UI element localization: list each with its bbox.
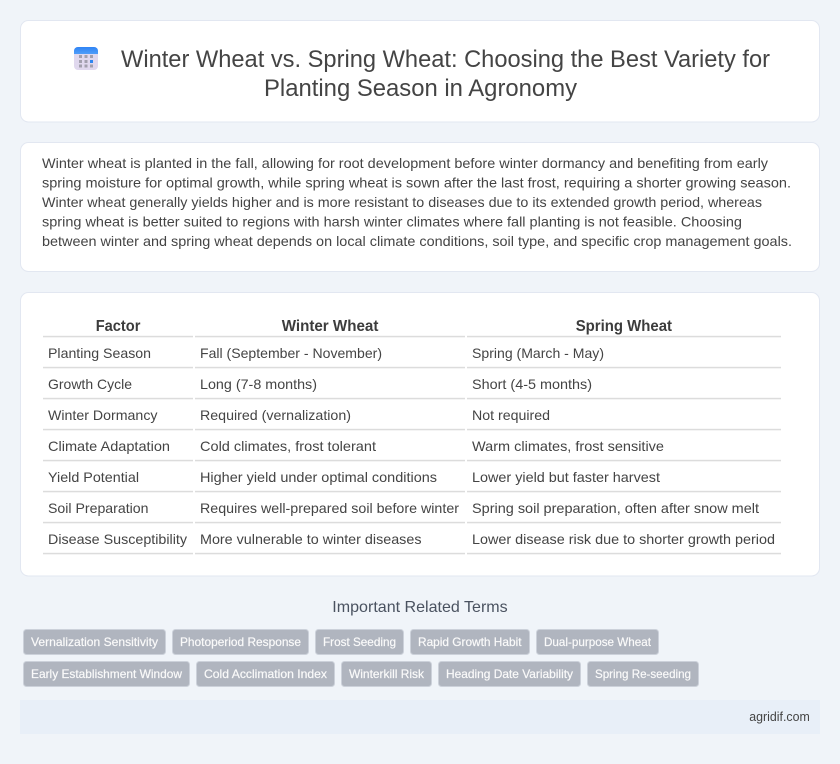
- tag: [172, 630, 308, 654]
- tag: Cold Acclimation Index: [204, 667, 327, 681]
- table row: growth cycle: Long (7-8 months): [200, 376, 317, 392]
- heading: related terms: Important Related Terms: [332, 599, 508, 616]
- tag: Winterkill Risk: [349, 667, 425, 681]
- panel: summary paragraph: [20, 142, 820, 272]
- table row: planting season: Planting Season: [48, 345, 151, 361]
- tag: [342, 662, 432, 686]
- tag: Early Establishment Window: [31, 667, 182, 681]
- tag: [24, 630, 166, 654]
- tag: Vernalization Sensitivity: [31, 635, 158, 649]
- table row: disease susceptibility: Disease Susceptibility: [48, 531, 187, 547]
- table header row: Factor: [96, 318, 140, 335]
- table row: planting season: [48, 345, 604, 361]
- table row: winter dormancy: Not required: [472, 407, 550, 423]
- tag: [438, 662, 580, 686]
- table row: growth cycle: Growth Cycle: [48, 376, 132, 392]
- tag: [316, 630, 404, 654]
- table row: soil preparation: Soil Preparation: [48, 500, 148, 516]
- panel: title card: [20, 20, 820, 122]
- table row: yield potential: Lower yield but faster harvest: [472, 469, 660, 485]
- text block: summary: spring moisture for optimal growth, while spring wheat is sown after the last frost, requiring a shorter growing season.: [42, 174, 791, 190]
- title: Planting Season in Agronomy: [264, 75, 577, 102]
- tag: Rapid Growth Habit: [418, 635, 522, 649]
- icon: calendar: [74, 47, 98, 70]
- tag: [410, 630, 530, 654]
- table header row: [96, 318, 673, 335]
- table row: climate adaptation: Cold climates, frost tolerant: [200, 438, 376, 454]
- table row: winter dormancy: Winter Dormancy: [48, 407, 158, 423]
- tag: Frost Seeding: [323, 635, 396, 649]
- tag: [196, 662, 334, 686]
- tag: Spring Re-seeding: [595, 667, 691, 681]
- table row: climate adaptation: Climate Adaptation: [48, 438, 170, 454]
- table row: soil preparation: Requires well-prepared soil before winter: [200, 500, 459, 516]
- table row: disease susceptibility: More vulnerable to winter diseases: [200, 531, 422, 547]
- table row: soil preparation: [48, 500, 759, 516]
- footer: agridif.com: [749, 709, 810, 724]
- table row: soil preparation: Spring soil preparation, often after snow melt: [472, 500, 759, 516]
- panel: comparison table: [20, 292, 820, 576]
- tag: [588, 662, 698, 686]
- table row: yield potential: Higher yield under optimal conditions: [200, 469, 437, 485]
- text block: summary: between winter and spring wheat depends on local climate conditions, soil type, and specific crop management goals.: [42, 233, 792, 249]
- tags: related terms: [24, 630, 698, 686]
- text block: summary: Winter wheat generally yields higher and is more resistant to diseases due to its extended growth period, whereas: [42, 194, 762, 210]
- tag: [536, 630, 658, 654]
- table row: climate adaptation: [48, 438, 664, 454]
- table row: planting season: Fall (September - November): [200, 345, 382, 361]
- table row: winter dormancy: Required (vernalization): [200, 407, 351, 423]
- table row: disease susceptibility: [48, 531, 775, 547]
- table row: planting season: Spring (March - May): [472, 345, 604, 361]
- table row: growth cycle: Short (4-5 months): [472, 376, 592, 392]
- text block: summary: Winter wheat is planted in the fall, allowing for root development before winter dormancy and benefiting from early: [42, 155, 768, 171]
- tag: Photoperiod Response: [180, 635, 301, 649]
- tag: Dual-purpose Wheat: [544, 635, 652, 649]
- title: [121, 46, 770, 102]
- text block: summary: [42, 155, 792, 249]
- title: Winter Wheat vs. Spring Wheat: Choosing the Best Variety for: [121, 46, 770, 73]
- tag: Heading Date Variability: [446, 667, 573, 681]
- table row: climate adaptation: Warm climates, frost sensitive: [472, 438, 664, 454]
- footer: [20, 700, 820, 734]
- table row: disease susceptibility: Lower disease risk due to shorter growth period: [472, 531, 775, 547]
- table header row: Spring Wheat: [576, 318, 673, 335]
- text block: summary: spring wheat is better suited to regions with harsh winter climates where fall planting is not feasible. Choosing: [42, 214, 742, 230]
- table row: yield potential: [48, 469, 660, 485]
- tag: [24, 662, 190, 686]
- table row: growth cycle: [48, 376, 592, 392]
- table row: winter dormancy: [48, 407, 550, 423]
- table header row: Winter Wheat: [282, 318, 379, 335]
- table row: yield potential: Yield Potential: [48, 469, 139, 485]
